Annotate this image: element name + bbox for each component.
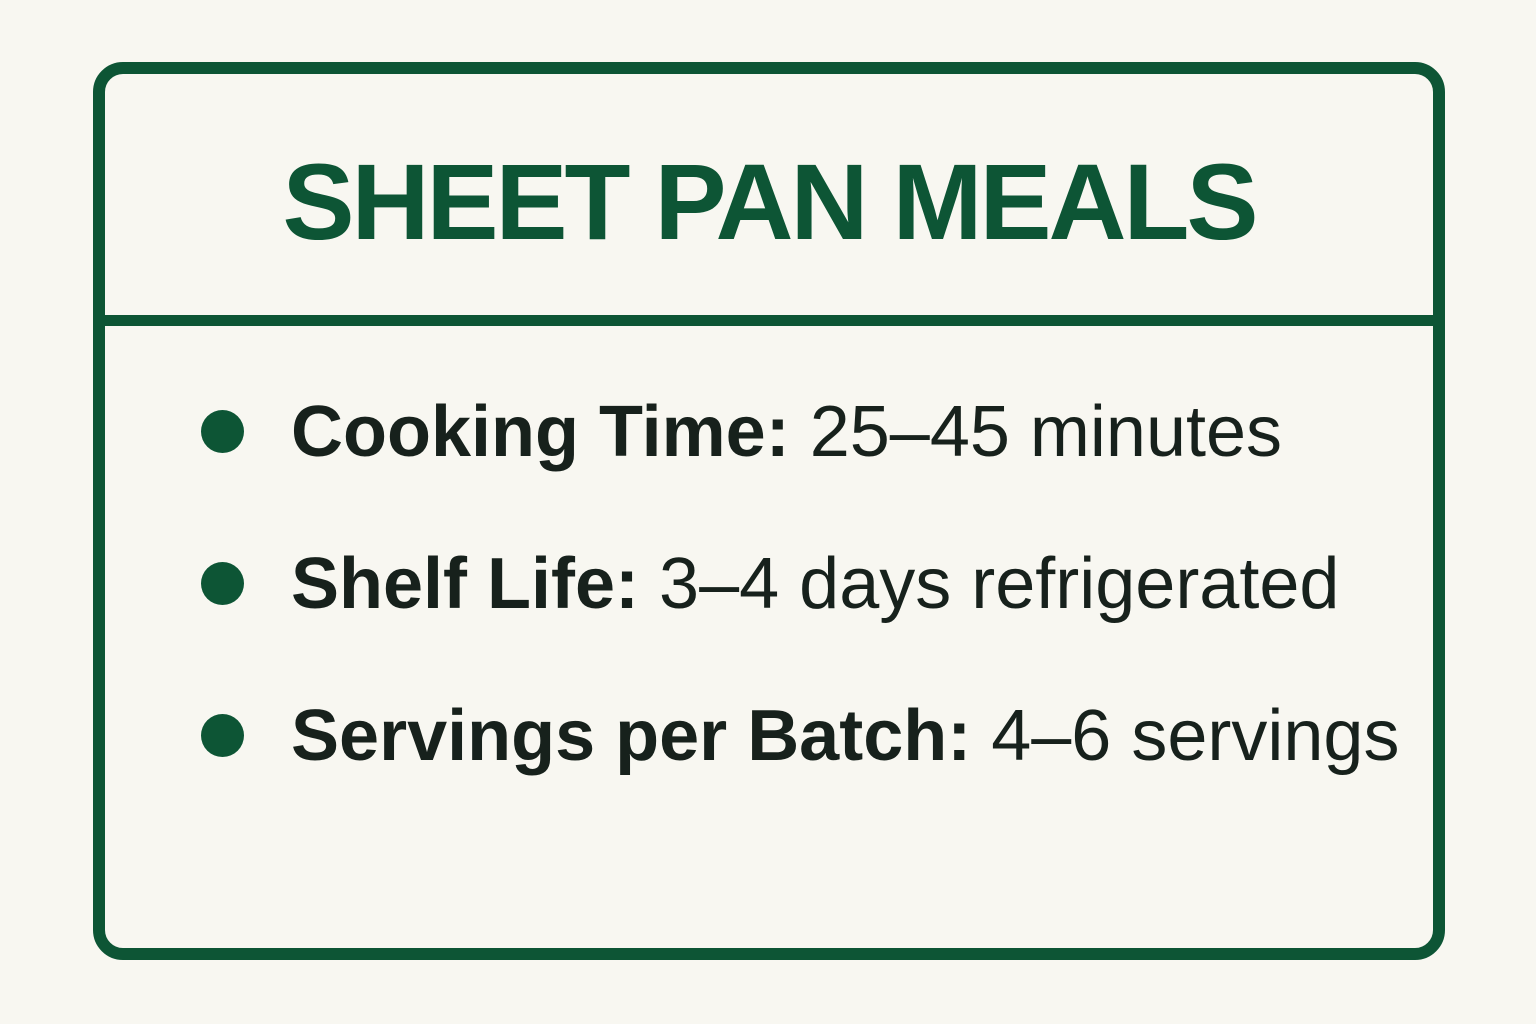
title: SHEET PAN MEALS (282, 141, 1256, 262)
panel: sheet pan meals card (93, 62, 1445, 960)
icon: bullet dot (201, 714, 244, 757)
text: shelf life: Shelf Life: 3–4 days refrigerated (291, 544, 1339, 624)
icon: bullet dot (201, 562, 244, 605)
bullet: cooking time (201, 392, 1282, 472)
bullet: servings per batch (201, 696, 1399, 776)
text: cooking time: Cooking Time: 25–45 minutes (291, 392, 1282, 472)
bullet: shelf life (201, 544, 1339, 624)
icon: bullet dot (201, 410, 244, 453)
text: servings: Servings per Batch: 4–6 servings (291, 696, 1399, 776)
